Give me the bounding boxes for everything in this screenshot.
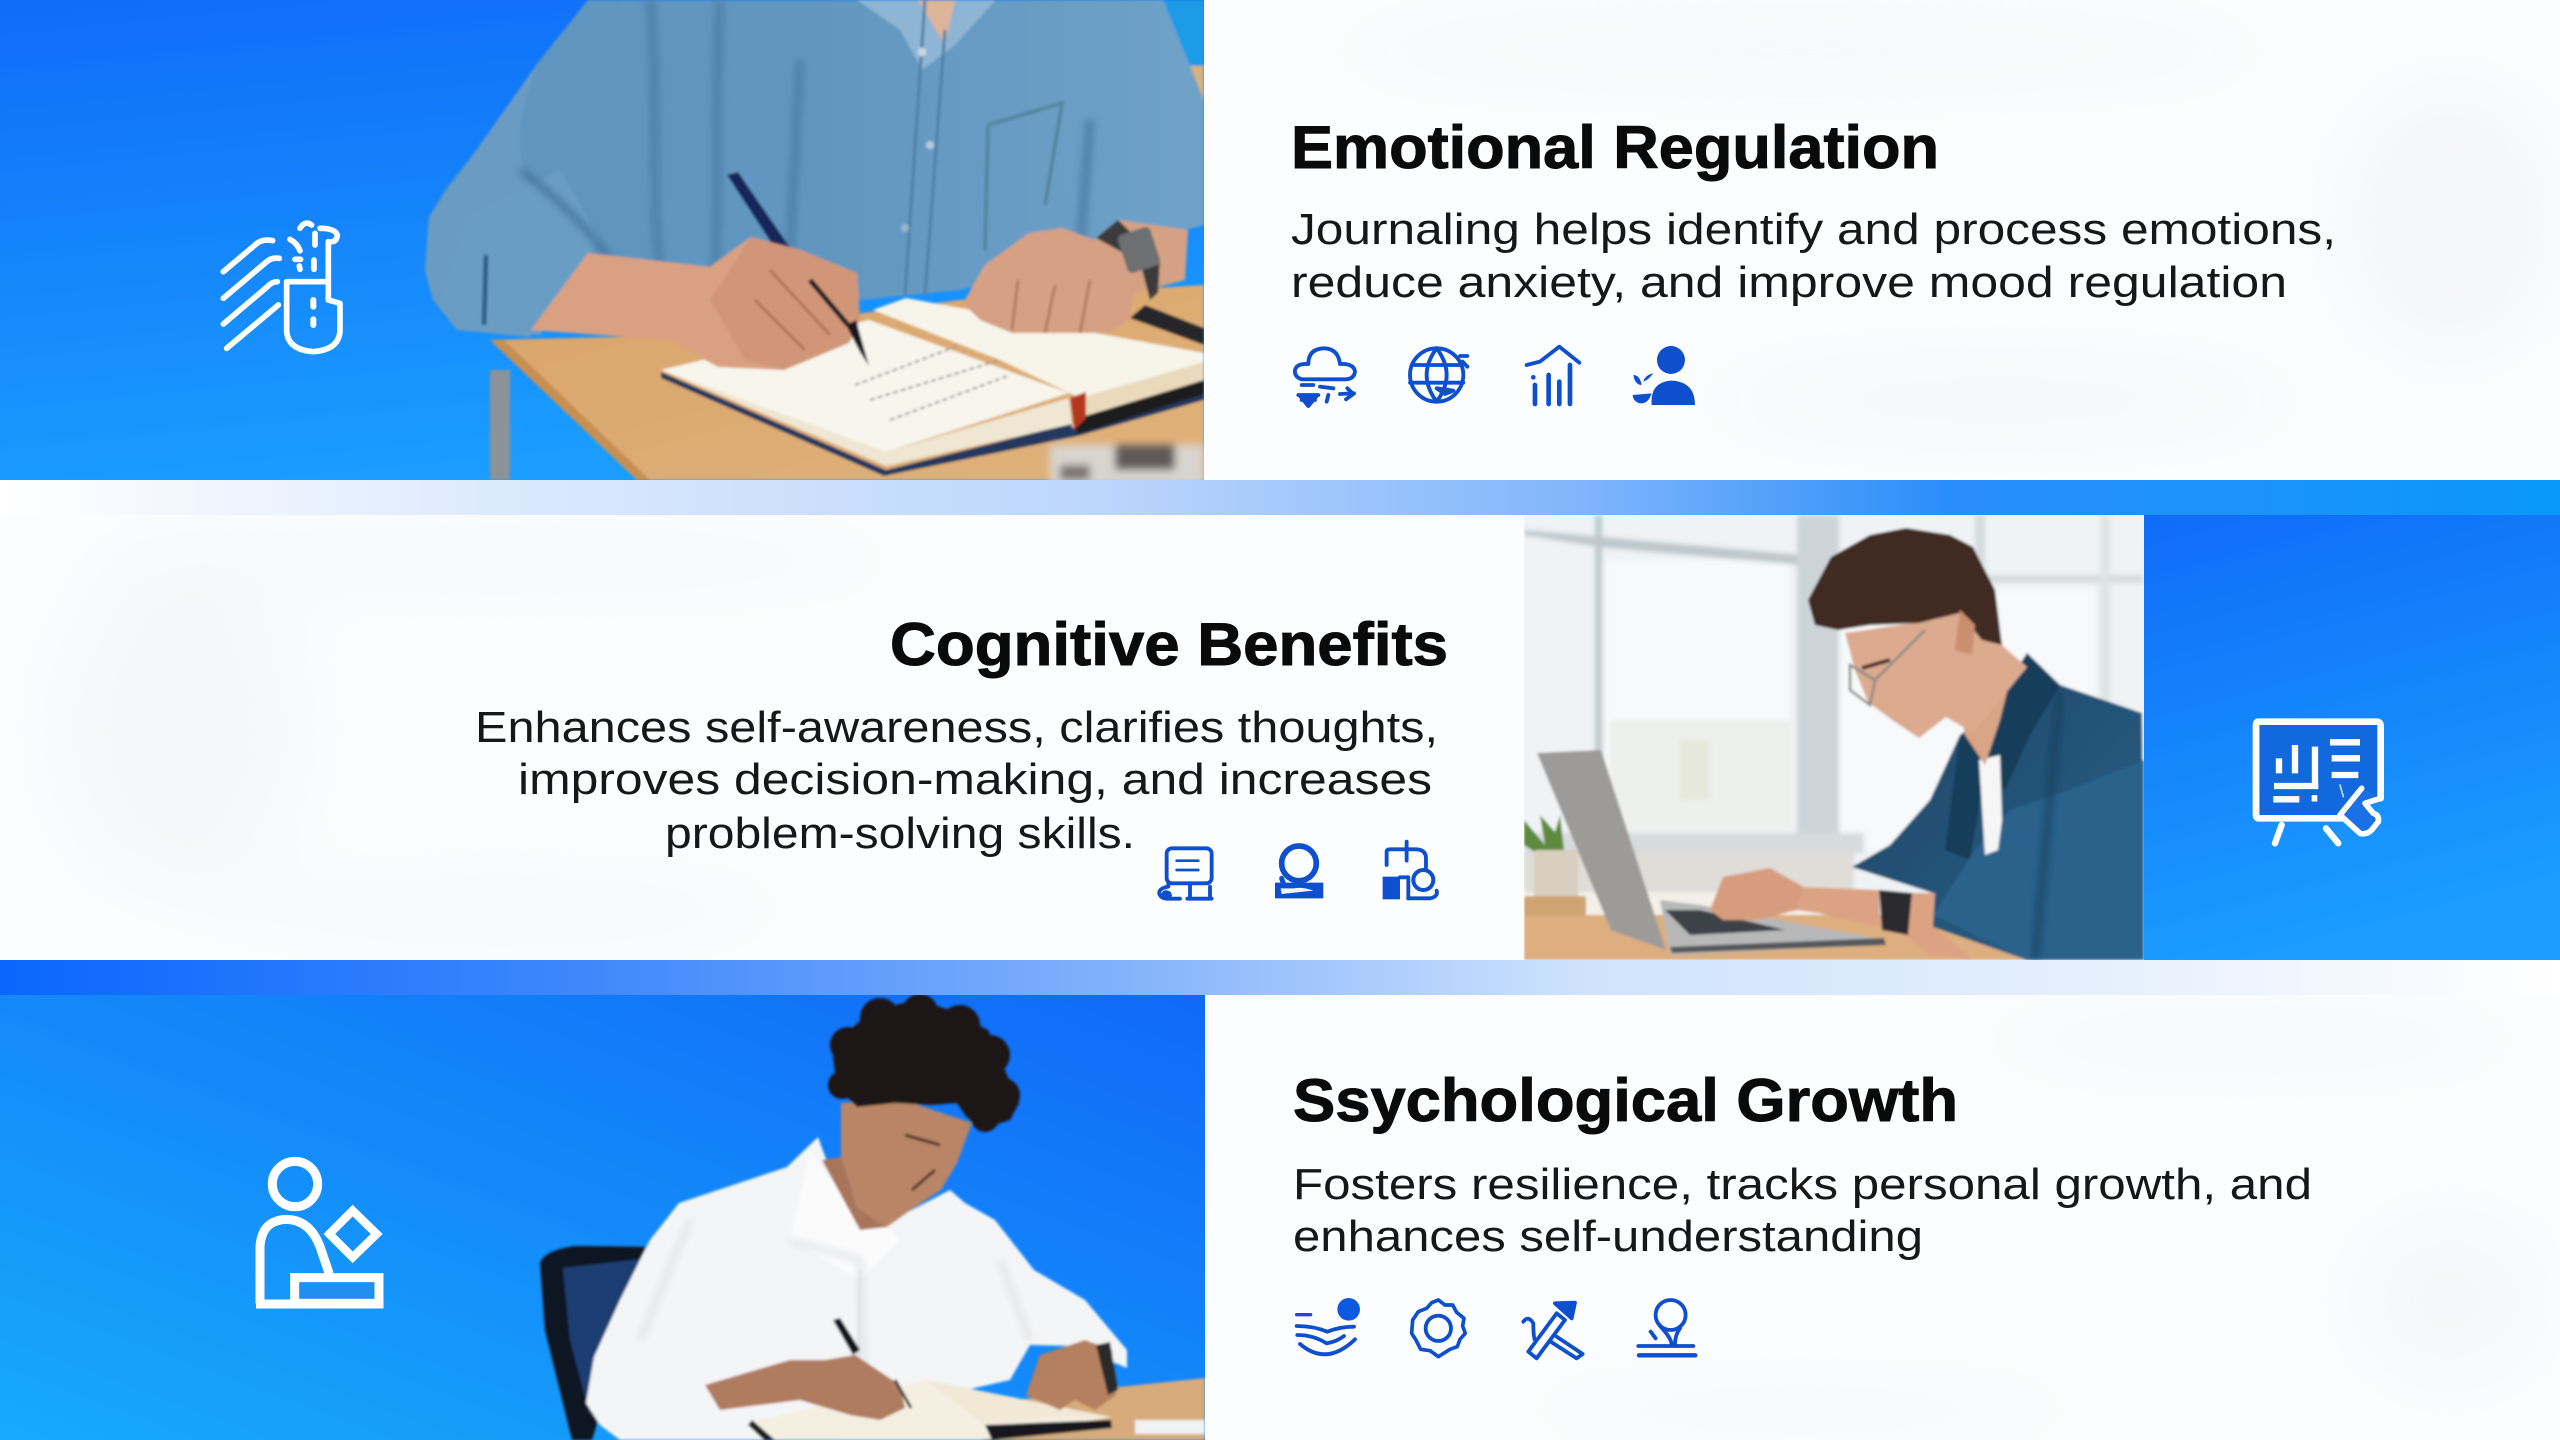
icon: person with diamond at desk — [256, 1161, 383, 1304]
icon: person with plant — [1633, 346, 1695, 405]
panel: emotional regulation visual — [0, 0, 1204, 485]
icon: cloud and wind — [1295, 348, 1355, 406]
body text: enhances self-understanding — [1293, 1212, 1923, 1261]
body text: Journaling helps identify and process emotions, — [1291, 205, 2336, 254]
desk — [490, 285, 1204, 480]
body text — [475, 703, 1438, 858]
curly hair — [828, 994, 1020, 1132]
watch — [1096, 220, 1160, 300]
icon row: cognitive benefits — [1159, 842, 1437, 899]
icon: globe — [1410, 348, 1467, 402]
body text — [1291, 205, 2336, 307]
panel: psychological growth text — [1293, 1010, 2550, 1435]
photo: student writing in notebook — [540, 994, 1205, 1440]
panel: cognitive benefits icon block — [2144, 515, 2560, 960]
blurred object at the table corner — [1050, 445, 1204, 485]
icon: emotional release test tube — [223, 223, 340, 352]
panel: cognitive benefits text — [479, 620, 1446, 901]
icon row: psychological growth — [1297, 1298, 1695, 1358]
dark pad under hand — [1130, 305, 1204, 345]
white undershirt — [1979, 755, 2002, 855]
panel: emotional regulation text — [1292, 124, 2332, 408]
body text: reduce anxiety, and improve mood regulation — [1291, 258, 2287, 307]
icon: person on ground line — [1638, 1300, 1695, 1355]
desk — [760, 1378, 1205, 1440]
background haze — [1500, 1010, 2550, 1435]
body text: problem-solving skills. — [665, 809, 1135, 858]
writing forearm and fist — [530, 236, 783, 372]
laptop — [1537, 750, 1666, 950]
body text: improves decision-making, and increases — [518, 755, 1432, 804]
icon: presentation board with chart — [2256, 722, 2381, 843]
band: light to blue gradient divider — [0, 480, 2560, 515]
typing fingers — [1710, 868, 1804, 920]
denim shirt — [425, 0, 1204, 337]
open book — [748, 1380, 1111, 1440]
window frames — [1524, 515, 2144, 935]
body text: Fosters resilience, tracks personal growth, and — [1293, 1160, 2312, 1209]
icon row: emotional regulation — [1295, 346, 1695, 406]
other hand — [1026, 1340, 1116, 1410]
neck — [1955, 660, 2015, 765]
writing arm and hand — [705, 1355, 905, 1420]
glasses — [1850, 630, 1925, 705]
body text — [1293, 1160, 2312, 1261]
icon: head on base — [1275, 846, 1323, 898]
icon: hammer with arrow — [1523, 1303, 1583, 1358]
icon: screen with stand — [1159, 848, 1212, 899]
band: blue to light gradient divider — [0, 960, 2560, 995]
hair — [1808, 528, 2002, 645]
heading: Cognitive Benefits — [890, 611, 1448, 678]
plant and pot — [1524, 815, 1564, 852]
face and neck — [841, 1100, 972, 1227]
face — [1845, 610, 2027, 738]
icon: route with magnifier — [1383, 842, 1437, 899]
pen tip — [846, 320, 869, 366]
pen — [833, 1318, 860, 1355]
body text: Enhances self-awareness, clarifies thoughts, — [475, 703, 1438, 752]
table — [1524, 893, 1824, 917]
notebook — [661, 372, 1204, 476]
background haze — [50, 530, 920, 940]
chair — [540, 1246, 656, 1440]
collar and neck — [857, 0, 996, 70]
panel: cognitive benefits photo — [1524, 515, 2144, 960]
photo: student working at a laptop — [1524, 515, 2144, 960]
background haze — [1320, 15, 2560, 440]
desk leg — [490, 370, 510, 480]
forearm and hand — [1797, 887, 1880, 927]
icon: sun over waves — [1297, 1298, 1360, 1354]
shirt — [586, 1137, 1127, 1440]
heading: Ssychological Growth — [1293, 1067, 1958, 1134]
panel: psychological growth visual — [0, 994, 1205, 1440]
icon: house growth bars — [1527, 347, 1579, 404]
icon: gear — [1412, 1300, 1465, 1357]
photo: person journaling at a desk — [425, 0, 1204, 485]
right hand and wrist — [963, 220, 1188, 333]
jacket — [1852, 653, 2144, 960]
heading: Emotional Regulation — [1291, 114, 1939, 181]
pen body — [726, 171, 790, 248]
